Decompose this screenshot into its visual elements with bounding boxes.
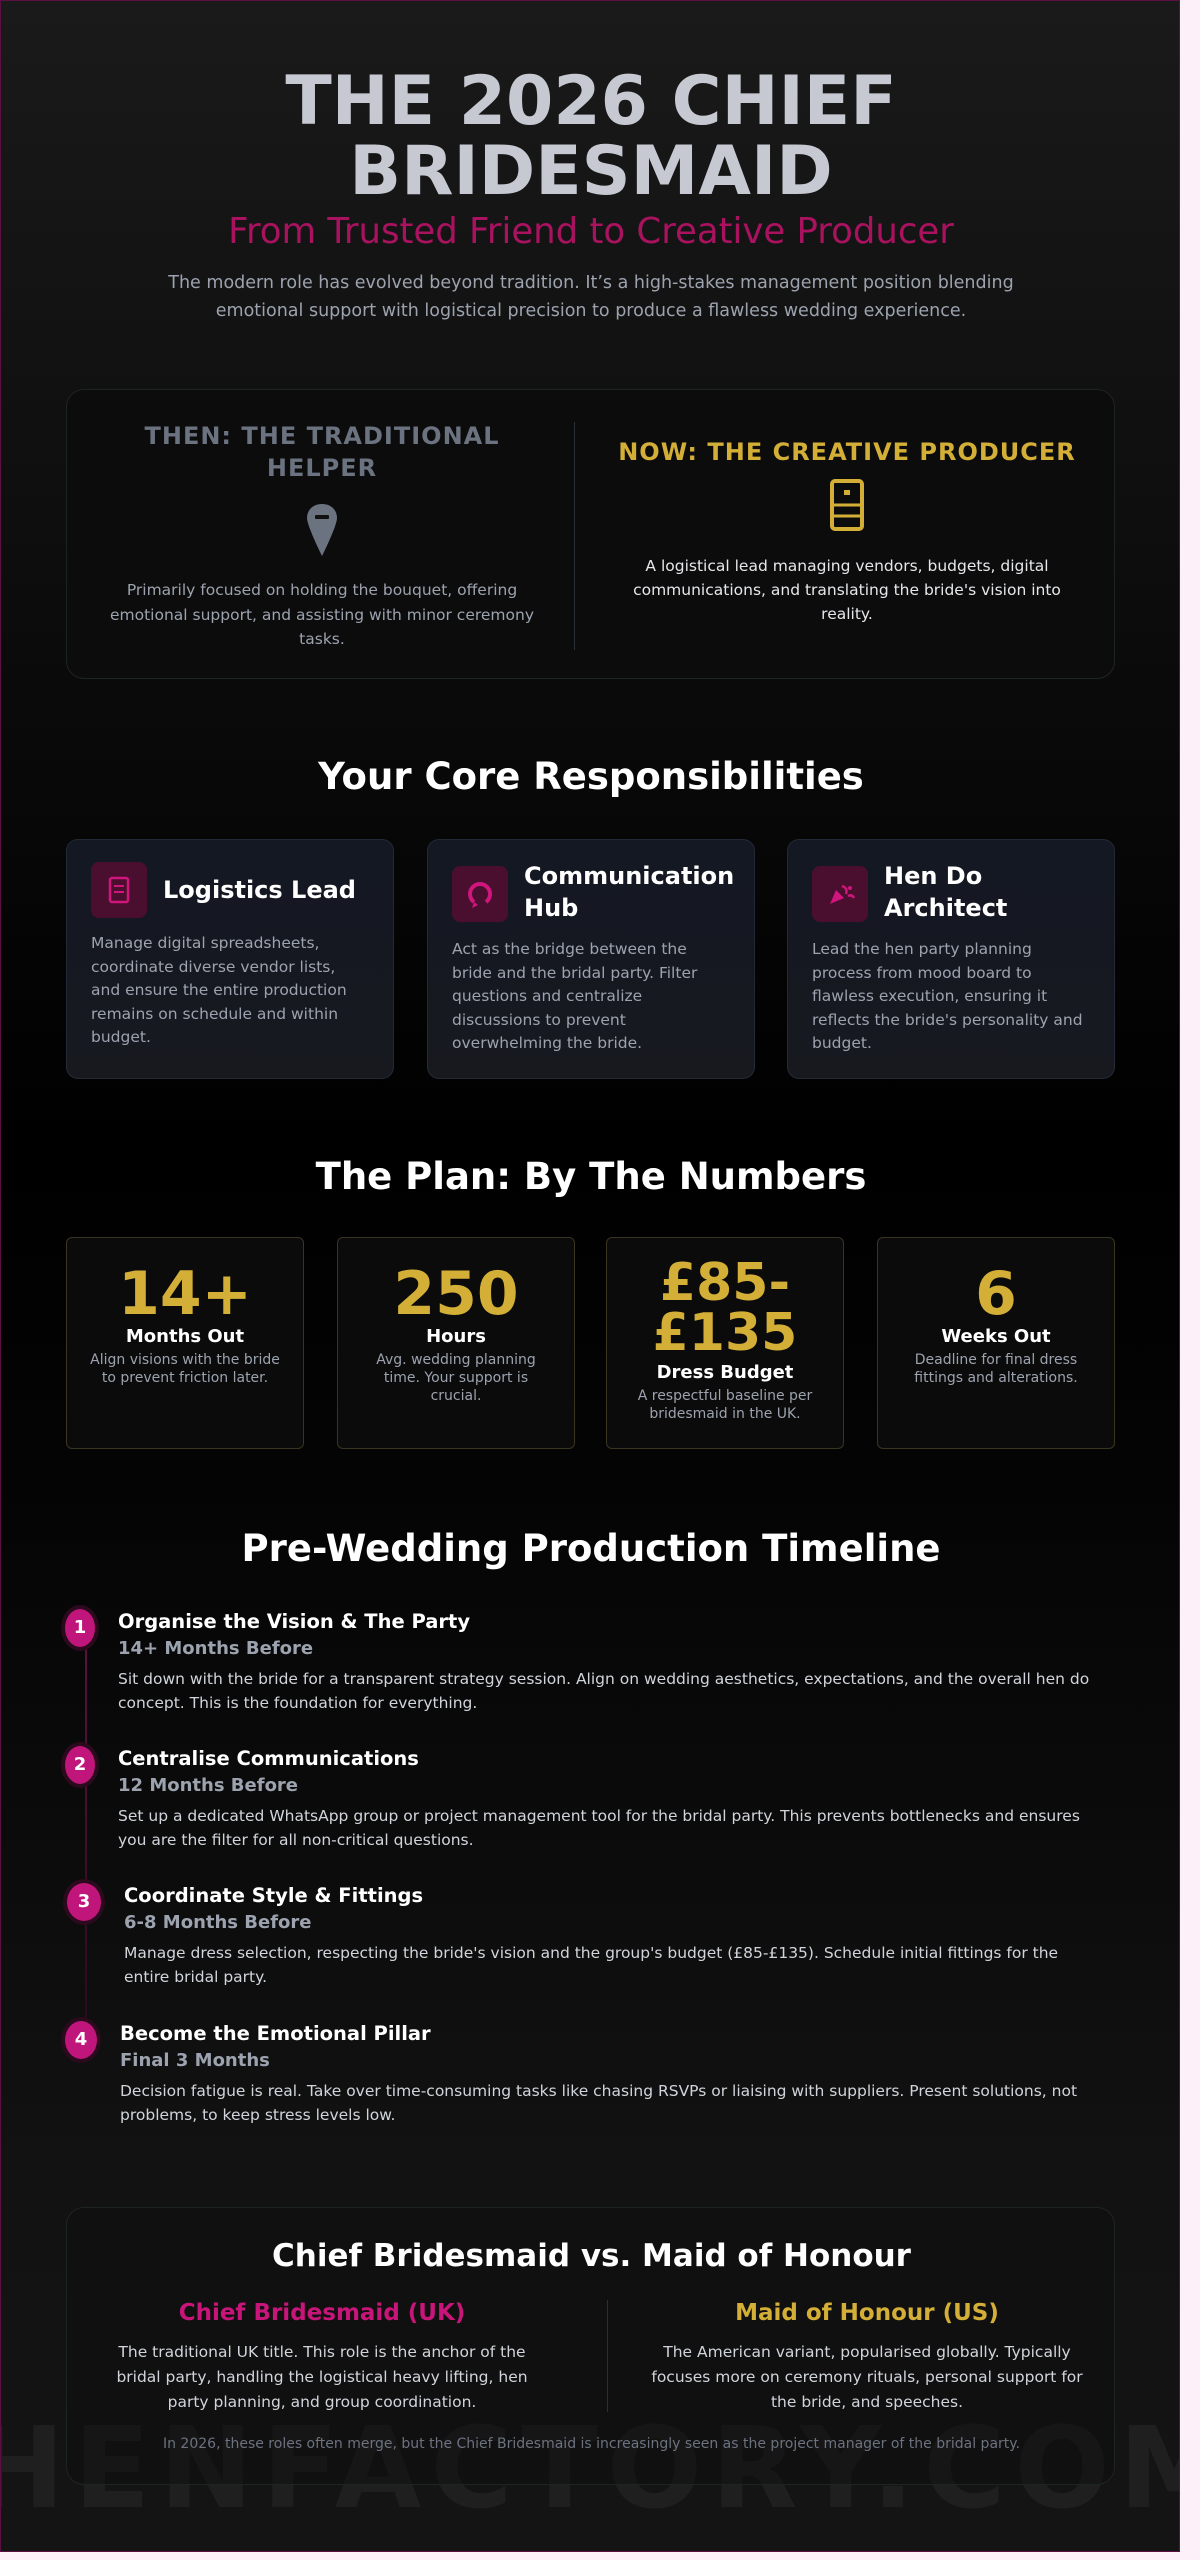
card body: Lead the hen party planning process from mood board to flawless execution, ensuring it reflects the bride's personality and budget. [812, 940, 1083, 1052]
card title: Logistics Lead [163, 876, 356, 904]
stat: 250: crucial. [431, 1388, 481, 1404]
timeline item 1: 1 [74, 1617, 86, 1638]
heading: timeline: Pre-Wedding Production Timeline [241, 1527, 941, 1570]
stat: 14+: to prevent friction later. [102, 1370, 268, 1386]
timeline item 3: Manage dress selection, respecting the bride's vision and the group's budget (£85-£135). Schedule initial fittings for the entire bridal party. [124, 1944, 1058, 1986]
card title [884, 862, 1007, 922]
column: UK: The traditional UK title. This role is the anchor of the bridal party, handling the logistical heavy lifting, hen party planning, and group coordination. [116, 2343, 528, 2411]
timeline item 3 [63, 1879, 1058, 1986]
footer note: In 2026, these roles often merge, but the Chief Bridesmaid is increasingly seen as the project manager of the bridal party. [163, 2436, 1020, 2452]
column: US: Maid of Honour (US) [735, 2300, 999, 2326]
stat: budget: £85- [660, 1253, 790, 1313]
timeline item 3: Coordinate Style & Fittings [124, 1884, 423, 1907]
panel: comparison [66, 2207, 1115, 2485]
timeline item 4: Final 3 Months [120, 2050, 270, 2071]
timeline item 4: Become the Emotional Pillar [120, 2022, 431, 2045]
stat: budget: Dress Budget [657, 1362, 793, 1383]
panel: then vs now [66, 389, 1115, 679]
stat: 14+: Months Out [126, 1326, 244, 1347]
card body: Act as the bridge between the bride and the bridal party. Filter questions and centralize discussions to prevent overwhelming the bride. [452, 940, 697, 1052]
column: UK: Chief Bridesmaid (UK) [179, 2300, 465, 2326]
column: UK [116, 2300, 528, 2411]
timeline item 2: 2 [74, 1754, 86, 1775]
stat: 6: fittings and alterations. [914, 1370, 1078, 1386]
timeline item 1 [61, 1605, 1089, 1712]
card title [524, 862, 734, 922]
icon: cabinet [830, 479, 864, 531]
title: BRIDESMAID [349, 132, 833, 211]
subtitle: From Trusted Friend to Creative Producer [228, 211, 954, 252]
stat: 250: time. Your support is [384, 1370, 528, 1386]
stat: budget: bridesmaid in the UK. [649, 1406, 801, 1422]
timeline item 2: Set up a dedicated WhatsApp group or project management tool for the bridal party. This prevents bottlenecks and ensures you are the filter for all non-critical questions. [118, 1807, 1080, 1849]
timeline item 2: 12 Months Before [118, 1775, 298, 1796]
timeline item 2 [61, 1742, 1080, 1849]
title: THE 2026 CHIEF [285, 62, 897, 141]
icon: chat [452, 866, 508, 922]
title [285, 62, 897, 211]
stat: budget: £135 [653, 1303, 797, 1363]
heading: responsibilities: Your Core Responsibilities [318, 755, 864, 798]
icon: list [91, 862, 147, 918]
intro text: The modern role has evolved beyond tradition. It’s a high-stakes management position blending emotional support with logistical precision to produce a flawless wedding experience. [168, 273, 1014, 321]
then column [110, 422, 534, 648]
now heading: NOW: THE CREATIVE PRODUCER [618, 438, 1076, 466]
card: logistics [66, 839, 394, 1079]
icon: pin [307, 504, 337, 556]
card title: Architect [884, 894, 1007, 922]
icon: celebration [812, 866, 868, 922]
timeline item 3: 6-8 Months Before [124, 1912, 312, 1933]
timeline item 1: Sit down with the bride for a transparent strategy session. Align on wedding aesthetics, expectations, and the overall hen do concept. This is the foundation for everything. [118, 1670, 1089, 1712]
timeline item 1: Organise the Vision & The Party [118, 1610, 470, 1633]
heading: numbers: The Plan: By The Numbers [316, 1155, 866, 1198]
stat: budget [606, 1237, 844, 1449]
stat: 250 [337, 1237, 575, 1449]
then text: Primarily focused on holding the bouquet, offering emotional support, and assisting with minor ceremony tasks. [110, 581, 534, 648]
stat: 6: 6 [975, 1259, 1017, 1329]
stat: 250: 250 [393, 1259, 519, 1329]
card title: Hen Do [884, 862, 982, 890]
stat: 6: Weeks Out [941, 1326, 1051, 1347]
stat: 14+: 14+ [118, 1259, 252, 1329]
timeline item 4 [61, 2017, 1077, 2124]
timeline item 4: Decision fatigue is real. Take over time-consuming tasks like chasing RSVPs or liaising with suppliers. Present solutions, not problems, to keep stress levels low. [120, 2082, 1077, 2124]
timeline item 4: 4 [75, 2029, 87, 2050]
card: hen do [787, 839, 1115, 1079]
timeline item 2: Centralise Communications [118, 1747, 419, 1770]
card title: Communication [524, 862, 734, 890]
column: US [651, 2300, 1083, 2411]
card title: Hub [524, 894, 578, 922]
stat: 6: Deadline for final dress [915, 1352, 1077, 1368]
stat: 14+ [66, 1237, 304, 1449]
timeline item 1: 14+ Months Before [118, 1638, 313, 1659]
stat: 14+: Align visions with the bride [90, 1352, 280, 1368]
timeline line [85, 1641, 87, 2041]
now column [618, 438, 1076, 623]
card: communication [427, 839, 755, 1079]
now text: A logistical lead managing vendors, budgets, digital communications, and translating the bride's vision into reality. [633, 557, 1061, 623]
stat: 250: Hours [426, 1326, 486, 1347]
comparison heading: Chief Bridesmaid vs. Maid of Honour [272, 2238, 911, 2274]
stat: 250: Avg. wedding planning [376, 1352, 536, 1368]
card body: Manage digital spreadsheets, coordinate diverse vendor lists, and ensure the entire production remains on schedule and within budget. [91, 934, 347, 1046]
stat: 6 [877, 1237, 1115, 1449]
column: US: The American variant, popularised globally. Typically focuses more on ceremony rituals, personal support for the bride, and speeches. [651, 2343, 1083, 2411]
then heading: THEN: THE TRADITIONAL HELPER [144, 422, 500, 482]
timeline item 3: 3 [78, 1891, 90, 1912]
stat: budget: A respectful baseline per [638, 1388, 812, 1404]
